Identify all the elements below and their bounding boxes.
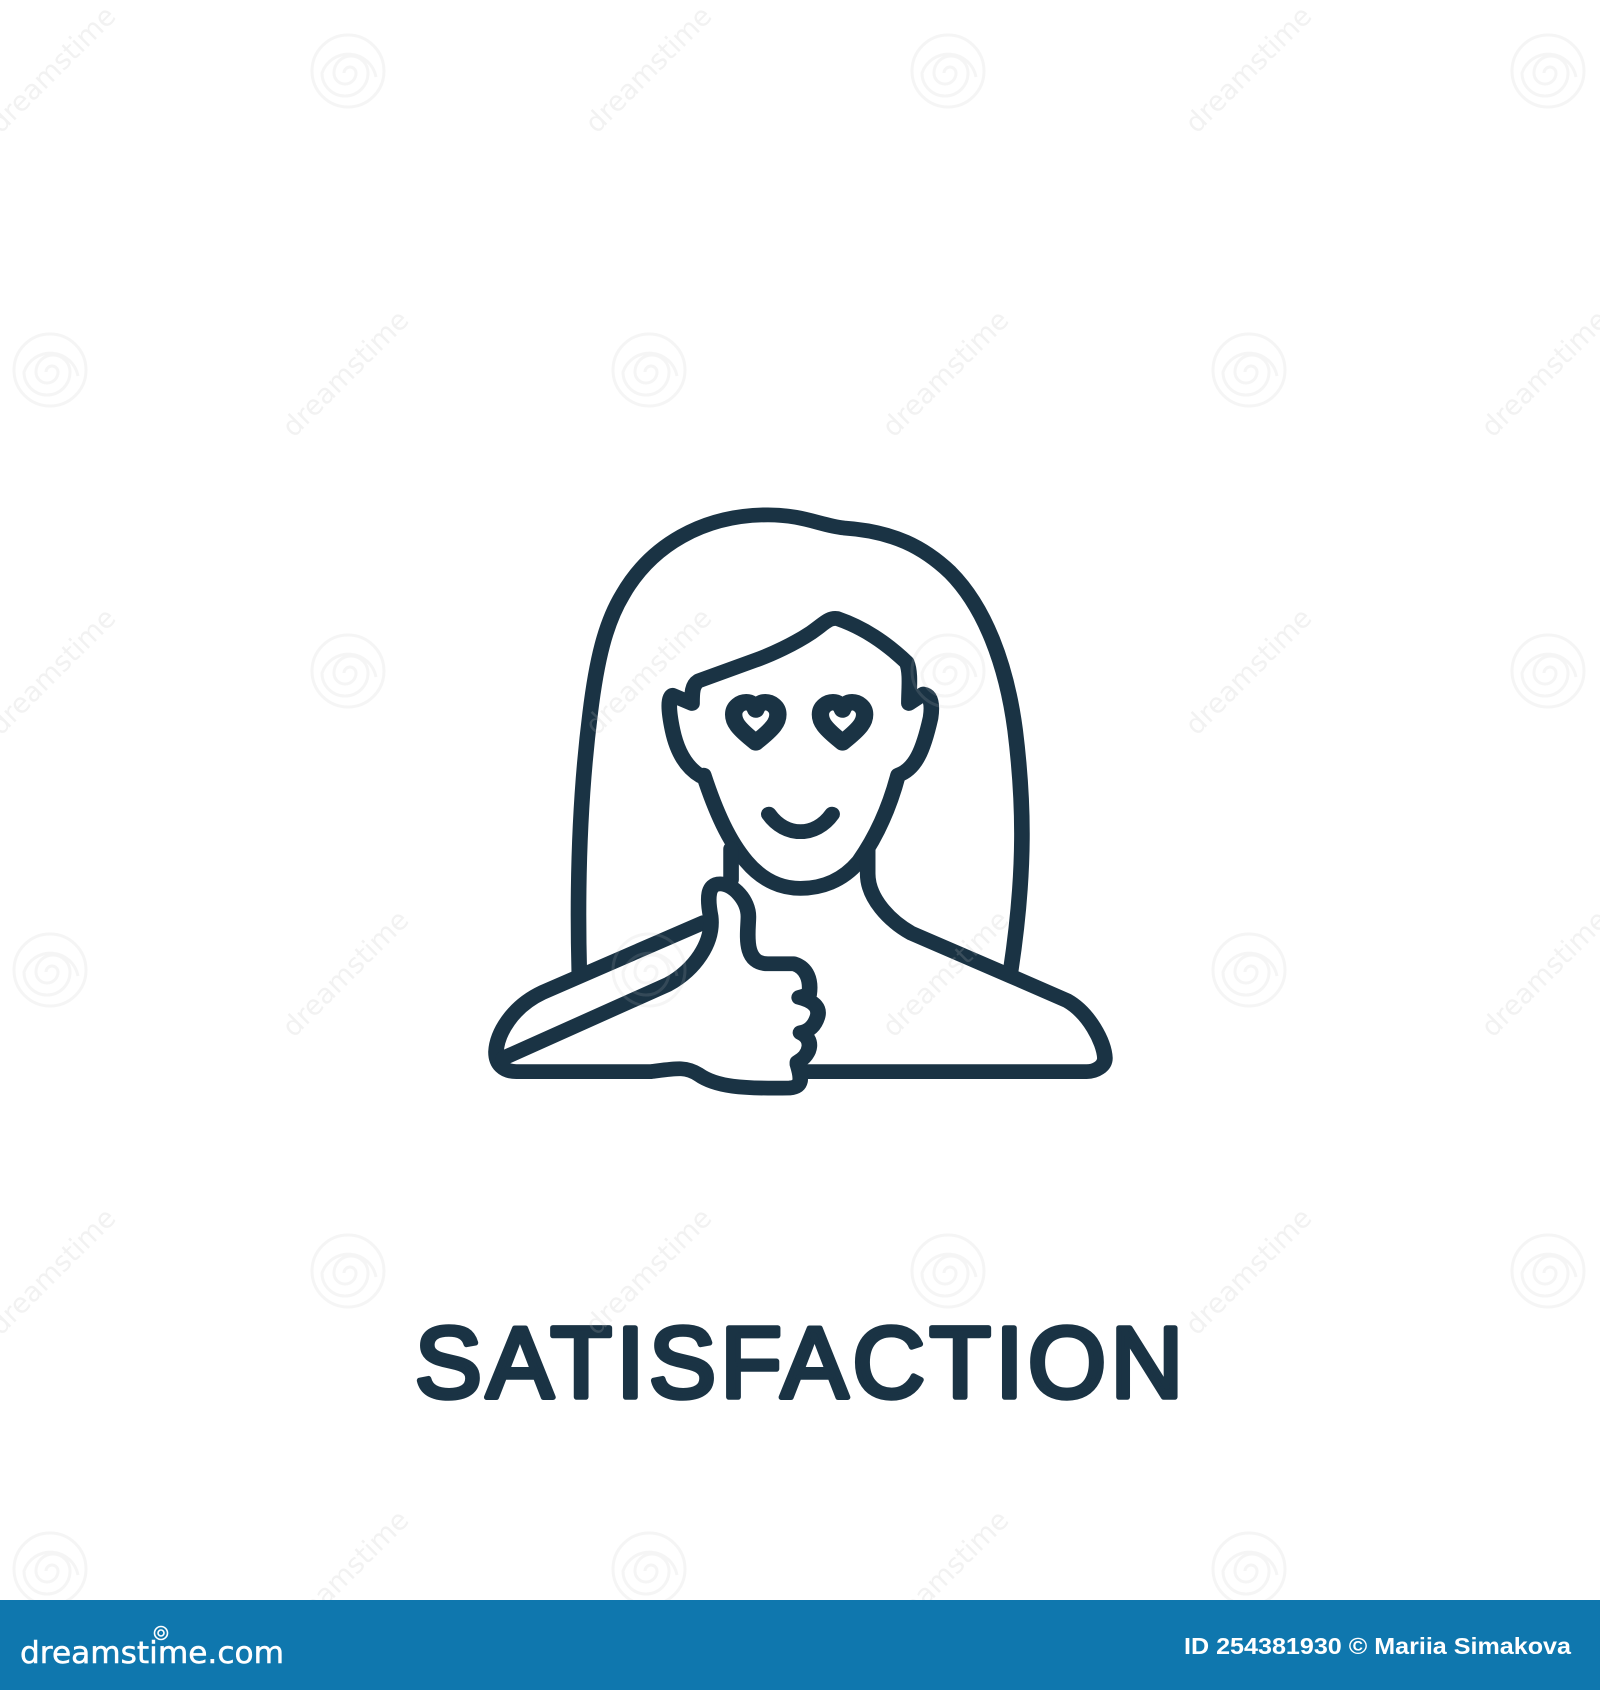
watermark pattern: dreamstime (276, 904, 415, 1043)
watermark pattern: dreamstime (579, 1202, 718, 1341)
watermark pattern: dreamstime (276, 304, 415, 443)
watermark pattern: dreamstime (276, 1504, 415, 1643)
watermark pattern: dreamstime (876, 1504, 1015, 1643)
watermark pattern: dreamstime (876, 904, 1015, 1043)
icon part: right eye heart (820, 702, 865, 742)
watermark pattern: dreamstime (579, 0, 718, 139)
footer banner (0, 1600, 1600, 1690)
icon part: neck and right shoulder (731, 849, 1105, 1072)
icon part: left shoulder and base (496, 923, 800, 1088)
icon: woman with heart eyes giving thumbs up (496, 515, 1105, 1088)
icon part: long hair outline (579, 515, 1022, 972)
watermark pattern: dreamstime (1179, 602, 1318, 741)
icon part: face, ears and hairline (669, 618, 931, 888)
watermark pattern: dreamstime (579, 602, 718, 741)
watermark pattern: dreamstime (1179, 0, 1318, 139)
title: SATISFACTION (415, 1307, 1183, 1419)
watermark pattern: dreamstime (1179, 1202, 1318, 1341)
icon part: left eye heart (734, 702, 778, 742)
icon part: smile (769, 814, 832, 832)
logo text: dreamstime.com (20, 1636, 284, 1671)
watermark pattern: dreamstime (876, 304, 1015, 443)
logo spiral (154, 1626, 168, 1640)
icon part: arm and thumbs-up hand (503, 884, 818, 1062)
image id and credit: ID 254381930 © Mariia Simakova (1184, 1633, 1571, 1659)
